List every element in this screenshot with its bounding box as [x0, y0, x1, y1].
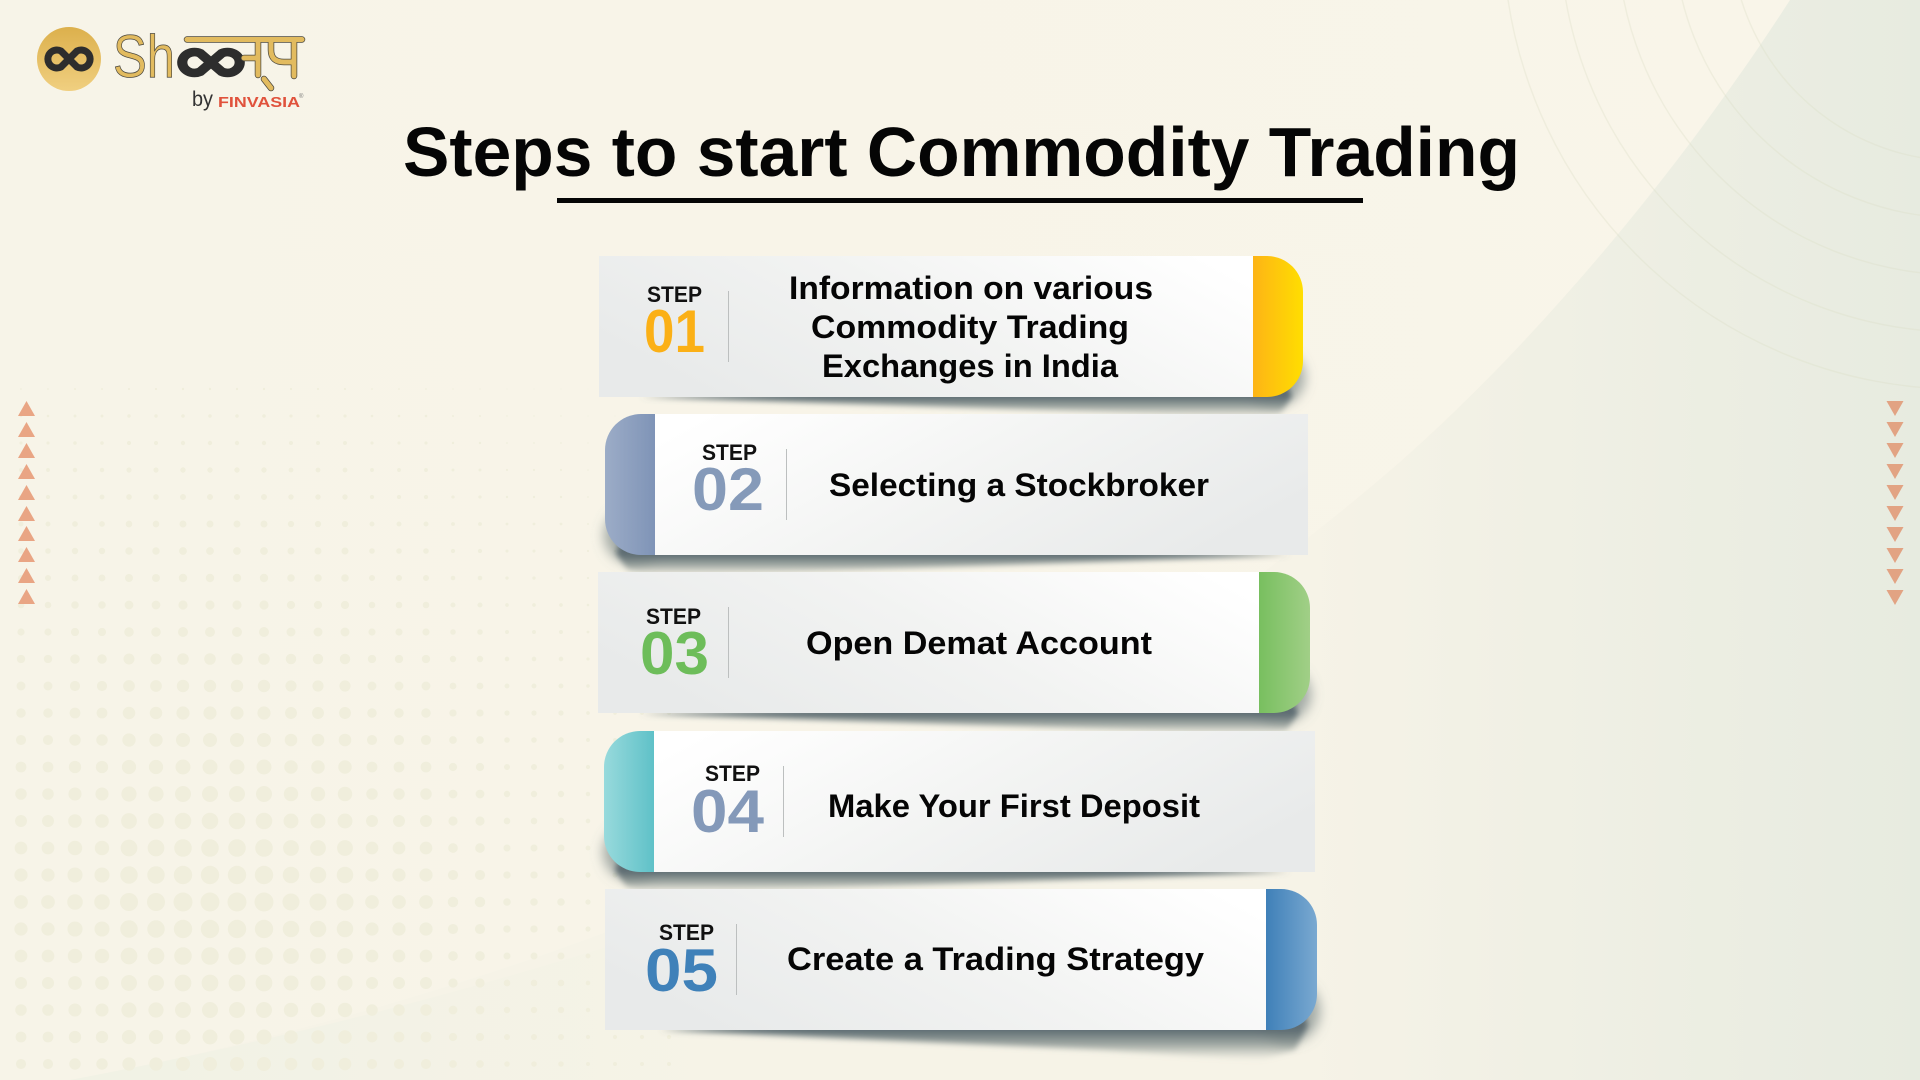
- step text: Open Demat Account: [806, 625, 1152, 661]
- step label: STEP: [705, 761, 760, 786]
- card body: [598, 572, 1259, 713]
- colored tab: [605, 414, 655, 555]
- colored tab: [604, 731, 654, 872]
- logo devanagari mark: [187, 40, 302, 88]
- step text: Selecting a Stockbroker: [829, 467, 1209, 503]
- step label: STEP: [647, 282, 702, 307]
- logo wordmark Sh: Sh: [113, 23, 175, 90]
- colored tab: [1259, 572, 1310, 713]
- colored tab: [1266, 889, 1317, 1030]
- card: step 03: [598, 572, 1310, 713]
- background concentric arcs: [1503, 0, 1920, 389]
- step number: 01: [644, 298, 705, 365]
- icon: gold circle with infinity: [37, 27, 101, 91]
- card shadows: [615, 380, 1308, 1060]
- card body: [654, 731, 1315, 872]
- step number: 03: [640, 620, 709, 687]
- step label: STEP: [646, 604, 701, 629]
- card: step 02: [605, 414, 1308, 555]
- card body: [599, 256, 1253, 397]
- step number: 04: [691, 778, 765, 845]
- soft tab shadows: [603, 350, 1320, 1042]
- divider: [736, 924, 738, 995]
- divider: [782, 766, 784, 837]
- logo Finvasia text: FINVASIA: [218, 94, 300, 111]
- step text: Exchanges in India: [822, 348, 1118, 384]
- card body: [605, 889, 1266, 1030]
- step text: Make Your First Deposit: [828, 788, 1200, 824]
- card: step 05: [605, 889, 1317, 1030]
- logo registered mark: ®: [299, 93, 304, 100]
- card: step 04: [604, 731, 1315, 872]
- step text: Commodity Trading: [811, 309, 1129, 345]
- title underline: [557, 198, 1363, 203]
- step text: Information on various: [789, 270, 1153, 306]
- colored tab: [1253, 256, 1303, 397]
- step label: STEP: [702, 440, 757, 465]
- step text: Create a Trading Strategy: [787, 941, 1204, 977]
- decorative down triangles, right: [1886, 401, 1904, 605]
- divider: [728, 607, 730, 678]
- logo by text: by: [192, 88, 213, 111]
- background halftone dots: [21, 389, 670, 1064]
- title: Steps to start Commodity Trading: [403, 113, 1520, 191]
- divider: [786, 449, 788, 520]
- logo infinity letter: [182, 52, 240, 73]
- step text: [789, 270, 1153, 384]
- card: step 01: [599, 256, 1303, 397]
- step number: 05: [645, 937, 718, 1004]
- step number: 02: [692, 456, 764, 523]
- card body: [655, 414, 1308, 555]
- decorative up triangles, left: [18, 401, 35, 604]
- divider: [728, 291, 730, 362]
- step label: STEP: [659, 920, 714, 945]
- logo: Shoonya by Finvasia: [37, 23, 304, 111]
